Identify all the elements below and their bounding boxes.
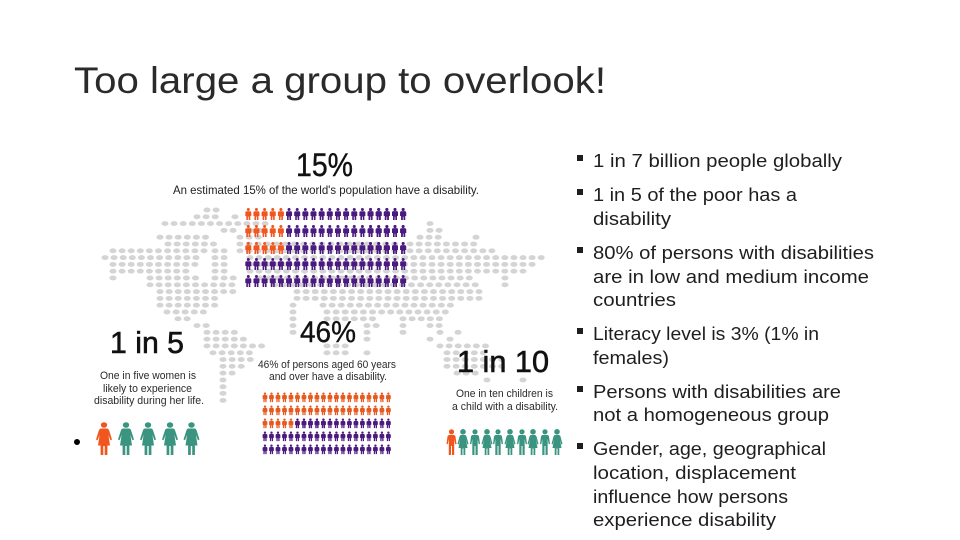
- caption: 1 in 5: One in five women is: [100, 370, 196, 382]
- bullet: 80%: 80% of persons with disabilities: [593, 243, 874, 263]
- bullet: 1 in 7: 1 in 7 billion people globally: [593, 151, 842, 171]
- pictogram: women: [96, 422, 200, 455]
- caption: 1 in 10: [452, 388, 558, 413]
- bullet list: [577, 151, 874, 530]
- world map dots: [105, 210, 544, 400]
- bullet: 1 in 5: [577, 185, 798, 229]
- caption: 1 in 5: [94, 370, 204, 407]
- bullet: literacy: females): [593, 348, 669, 368]
- title: Too large a group to overlook!: [74, 60, 606, 101]
- bullet: [74, 439, 80, 445]
- bullet: not homogeneous: not a homogeneous group: [593, 405, 829, 425]
- caption: 46%: 46% of persons aged 60 years: [258, 359, 396, 371]
- heading: 46%: 46%: [300, 316, 356, 349]
- bullet: 80%: are in low and medium income: [593, 267, 869, 287]
- bullet: not homogeneous: Persons with disabilities are: [593, 382, 841, 402]
- bullet: 1 in 5: disability: [593, 209, 671, 229]
- caption: 1 in 10: a child with a disability.: [452, 401, 558, 413]
- bullet: 80%: [577, 243, 874, 310]
- bullet: influences: [577, 439, 826, 530]
- caption: 15%: An estimated 15% of the world's population have a disability.: [173, 183, 479, 197]
- caption: 46%: and over have a disability.: [269, 371, 387, 383]
- caption: 46%: [258, 359, 396, 383]
- bullet: literacy: Literacy level is 3% (1% in: [593, 324, 819, 344]
- heading: 1 in 5: 1 in 5: [110, 325, 184, 360]
- pictogram: children: [446, 429, 562, 455]
- bullet: 80%: countries: [593, 290, 676, 310]
- bullet: influences: influence how persons: [593, 487, 788, 507]
- heading: 1 in 10: 1 in 10: [457, 344, 549, 379]
- bullet: influences: experience disability: [593, 510, 776, 530]
- caption: 1 in 5: likely to experience: [103, 383, 192, 395]
- pictogram: 15% of people: [245, 208, 406, 287]
- bullet: influences: location, displacement: [593, 463, 796, 483]
- caption: 1 in 10: One in ten children is: [456, 388, 553, 400]
- heading: 15%: 15%: [296, 147, 353, 183]
- bullet: not homogeneous: [577, 382, 841, 425]
- infographic panel: [74, 147, 562, 455]
- pictogram: 46% of older persons: [263, 392, 391, 454]
- bullet: literacy: [577, 324, 819, 368]
- bullet: 1 in 5: 1 in 5 of the poor has a: [593, 185, 798, 205]
- caption: 1 in 5: disability during her life.: [94, 395, 204, 407]
- bullet: influences: Gender, age, geographical: [593, 439, 826, 459]
